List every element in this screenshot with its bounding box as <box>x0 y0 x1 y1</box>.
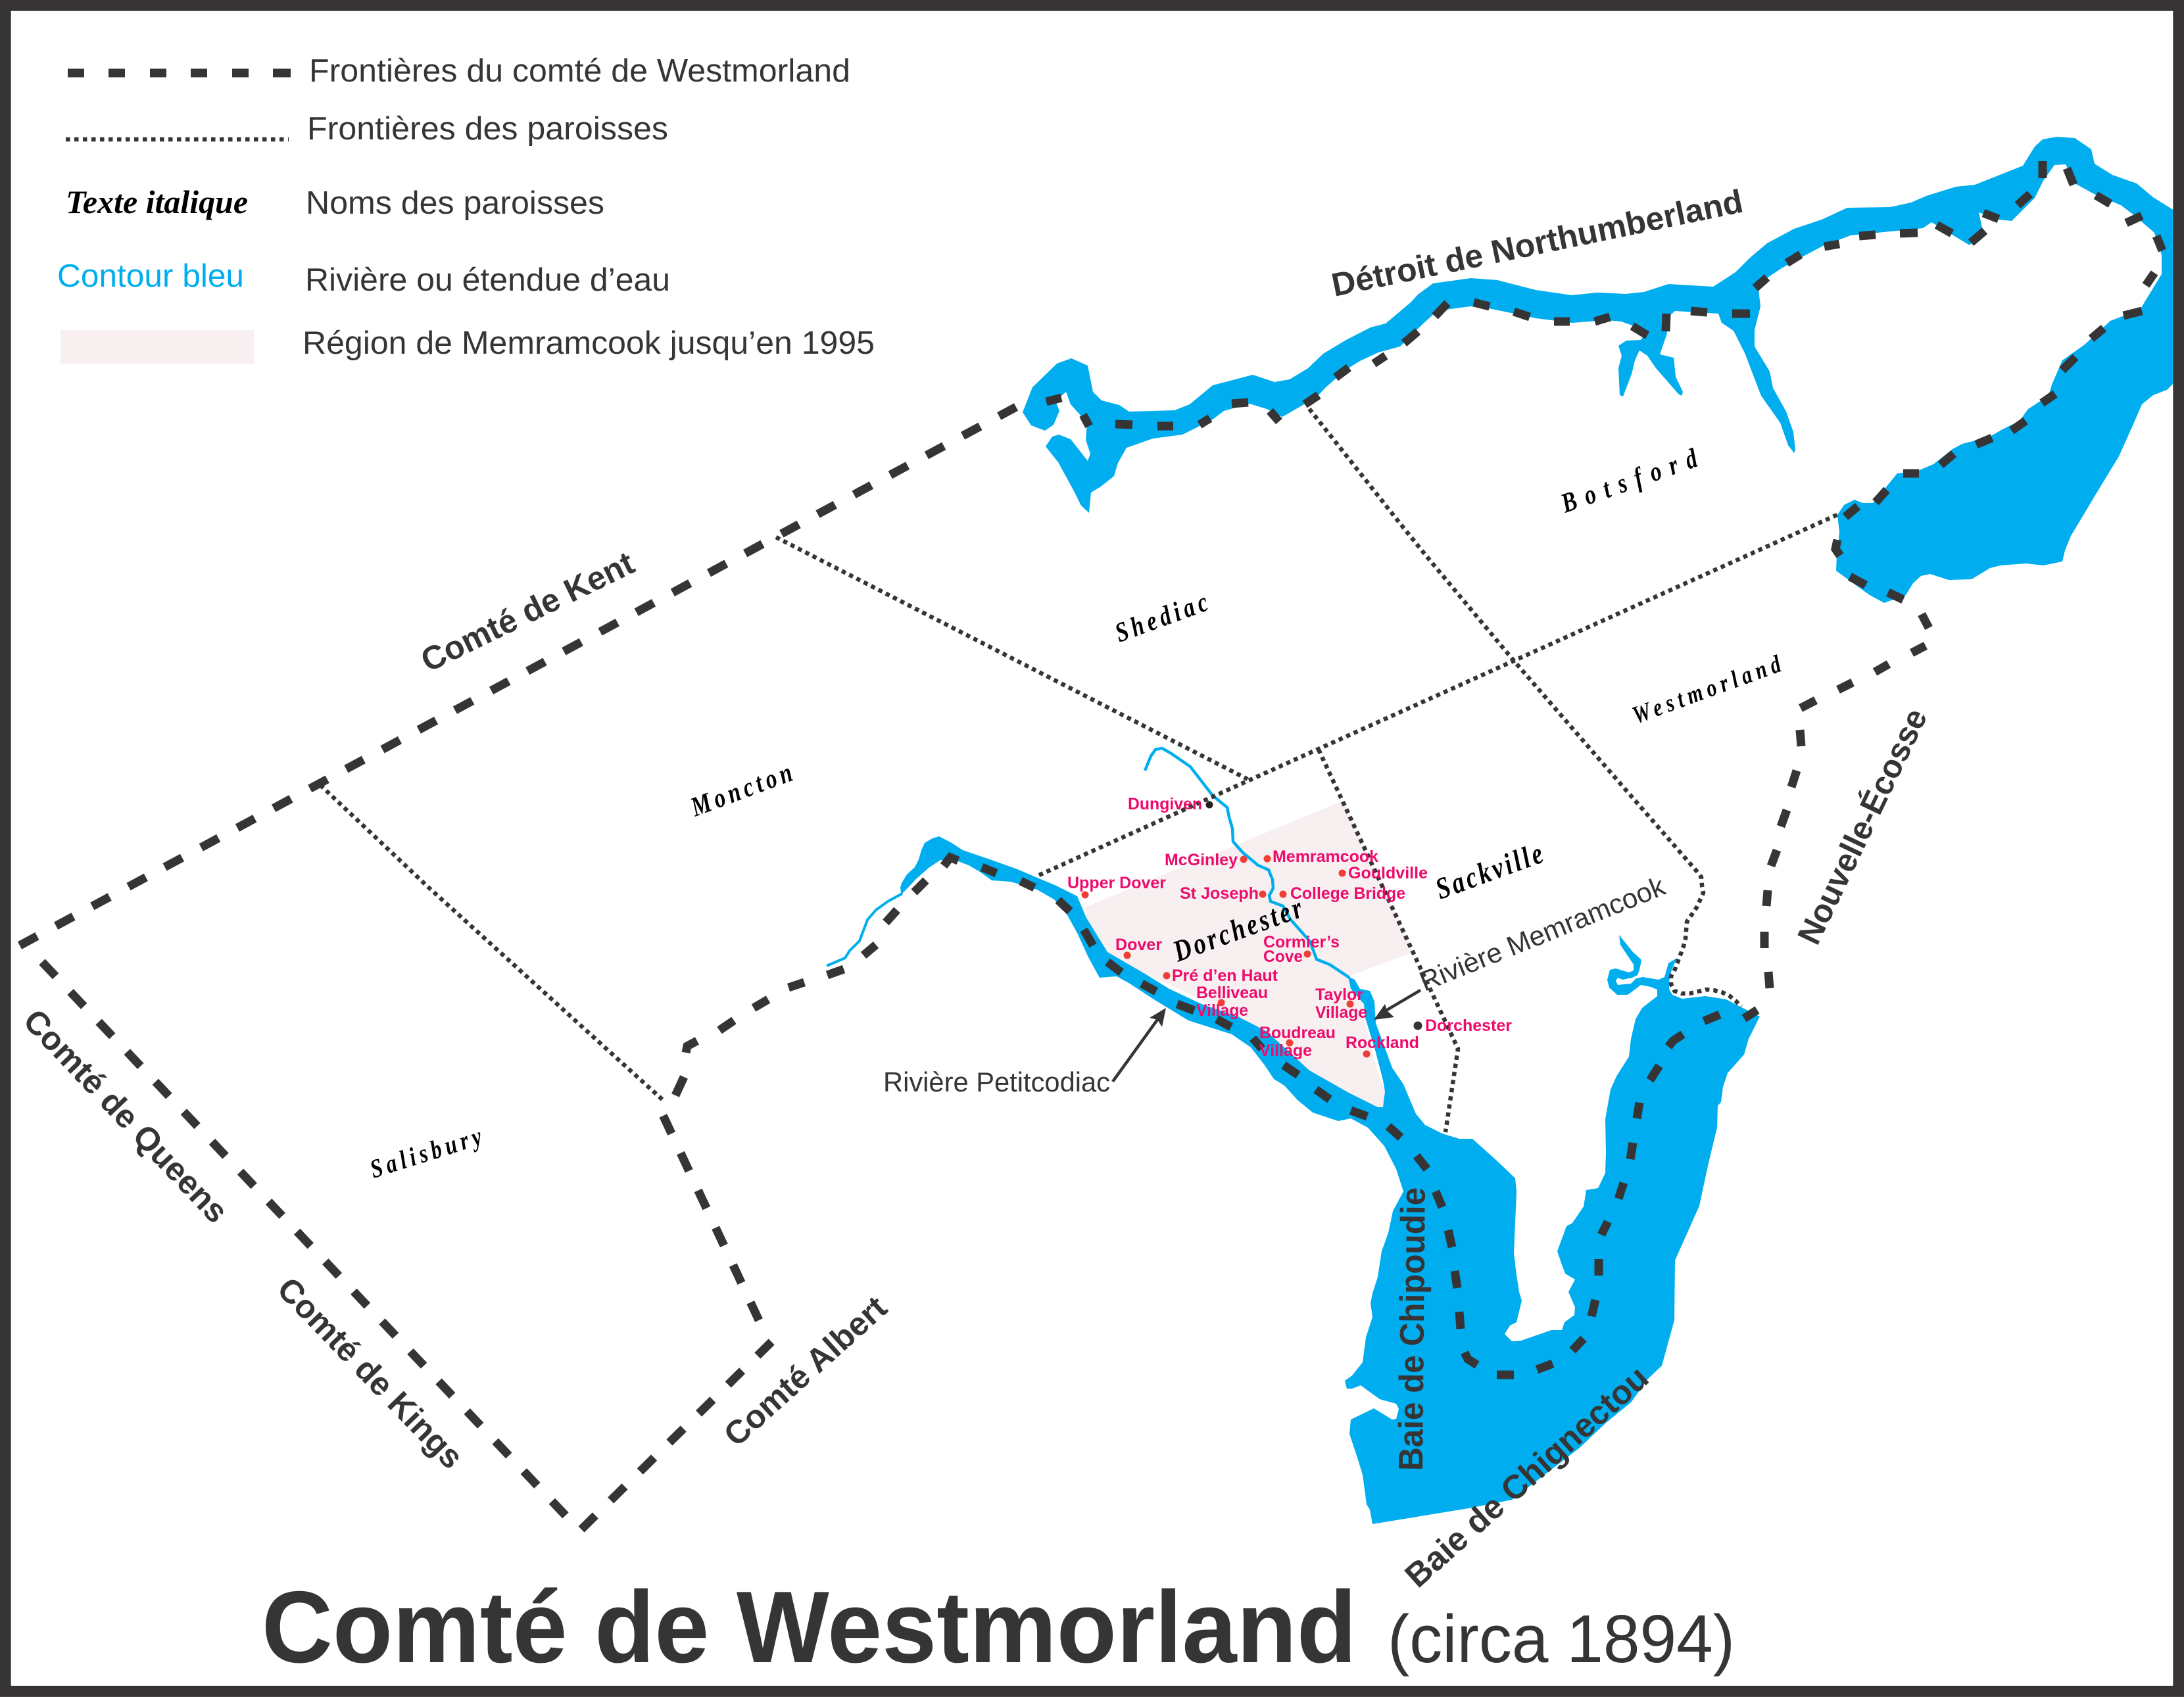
water: Northumberland Strait <box>1023 137 2174 603</box>
label: Comté Albert: Comté Albert <box>717 1289 894 1454</box>
locality: Taylor Village: Taylor <box>1315 986 1363 1004</box>
locality: Cormier's Cove: Cove <box>1263 947 1303 966</box>
legend <box>57 53 875 364</box>
locality: Belliveau Village <box>1196 984 1268 1020</box>
locality: Boudreau Village: Boudreau <box>1259 1024 1336 1042</box>
parish: Moncton: Moncton <box>686 757 796 823</box>
locality: McGinley: McGinley <box>1165 851 1238 869</box>
label: Rivière Petitcodiac: Rivière Petitcodiac <box>883 1066 1110 1097</box>
locality: Rockland: Rockland <box>1346 1034 1419 1052</box>
parish: Shediac: Shediac <box>1111 587 1212 648</box>
county boundaries <box>20 161 2162 1529</box>
locality: College Bridge: College Bridge <box>1290 884 1405 903</box>
title: main: Comté de Westmorland <box>262 1570 1357 1684</box>
locality: Boudreau Village <box>1259 1024 1336 1060</box>
locality: Boudreau Village: Village <box>1259 1041 1312 1060</box>
legend: parish names label: Noms des paroisses <box>306 185 604 221</box>
locality: St Joseph: St Joseph <box>1180 884 1259 903</box>
river: Memramcook <box>1145 748 1349 978</box>
parish: Sackville: Sackville <box>1431 837 1547 906</box>
neighbouring county and water labels <box>16 183 1934 1594</box>
locality: Upper Dover: Upper Dover <box>1067 874 1166 892</box>
arrow: to Memramcook river <box>1374 990 1420 1020</box>
locality: Memramcook: Memramcook <box>1273 848 1378 866</box>
legend: parish boundary swatch <box>66 137 289 141</box>
label: Détroit de Northumberland: Détroit de Northumberland <box>1328 183 1746 304</box>
locality: Cormier's Cove <box>1263 933 1340 966</box>
river: upper Petitcodiac <box>827 894 902 966</box>
localities <box>1067 795 1512 1060</box>
parish boundaries <box>320 409 1840 1132</box>
legend: parish boundary label: Frontières des paroisses <box>307 111 668 147</box>
label: Comté de Kings: Comté de Kings <box>270 1270 471 1476</box>
label: Baie de Chignectou: Baie de Chignectou <box>1397 1358 1655 1594</box>
legend: blue outline sample: Contour bleu <box>57 258 244 294</box>
label: Comté de Queens: Comté de Queens <box>16 1002 235 1230</box>
label: Comté de Kent: Comté de Kent <box>415 544 640 679</box>
title: date: (circa 1894) <box>1388 1601 1735 1677</box>
locality: Pré d'en Haut: Pré d’en Haut <box>1172 967 1278 985</box>
parish: Westmorland: Westmorland <box>1629 650 1785 729</box>
locality: Dungiven: Dungiven <box>1128 795 1202 813</box>
parish: Salisbury: Salisbury <box>366 1121 486 1183</box>
label: Rivière Memramcook: Rivière Memramcook <box>1415 870 1670 997</box>
parish: Botsford: Botsford <box>1557 443 1702 519</box>
parish names <box>366 443 1785 1183</box>
legend: Memramcook region label: Région de Memramcook jusqu’en 1995 <box>303 325 875 361</box>
locality: Taylor Village: Village <box>1315 1003 1367 1022</box>
locality: Taylor Village <box>1315 986 1367 1022</box>
water: Petitcodiac river and Chignecto Bay <box>900 836 1760 1524</box>
label: Nouvelle-Écosse: Nouvelle-Écosse <box>1790 703 1934 950</box>
legend: water label: Rivière ou étendue d’eau <box>305 262 670 298</box>
parish: Dorchester: Dorchester <box>1169 891 1307 969</box>
locality: Gouldville: Gouldville <box>1348 864 1428 882</box>
legend: Memramcook region swatch <box>61 330 254 364</box>
region: Memramcook until 1995 <box>1085 801 1413 1111</box>
legend: italic text sample: Texte italique <box>66 183 248 220</box>
arrow: to Petitcodiac river <box>1113 1008 1166 1082</box>
locality: Belliveau Village: Belliveau <box>1196 984 1268 1002</box>
title <box>262 1570 1735 1684</box>
locality: Dorchester: Dorchester <box>1425 1016 1512 1035</box>
locality: Dover: Dover <box>1115 936 1162 954</box>
locality: Cormier's Cove: Cormier’s <box>1263 933 1340 951</box>
locality: Belliveau Village: Village <box>1196 1001 1248 1020</box>
legend: county boundary swatch <box>68 68 291 78</box>
label: Baie de Chipoudie: Baie de Chipoudie <box>1392 1187 1433 1471</box>
legend: county boundary label: Frontières du comté de Westmorland <box>309 53 850 89</box>
